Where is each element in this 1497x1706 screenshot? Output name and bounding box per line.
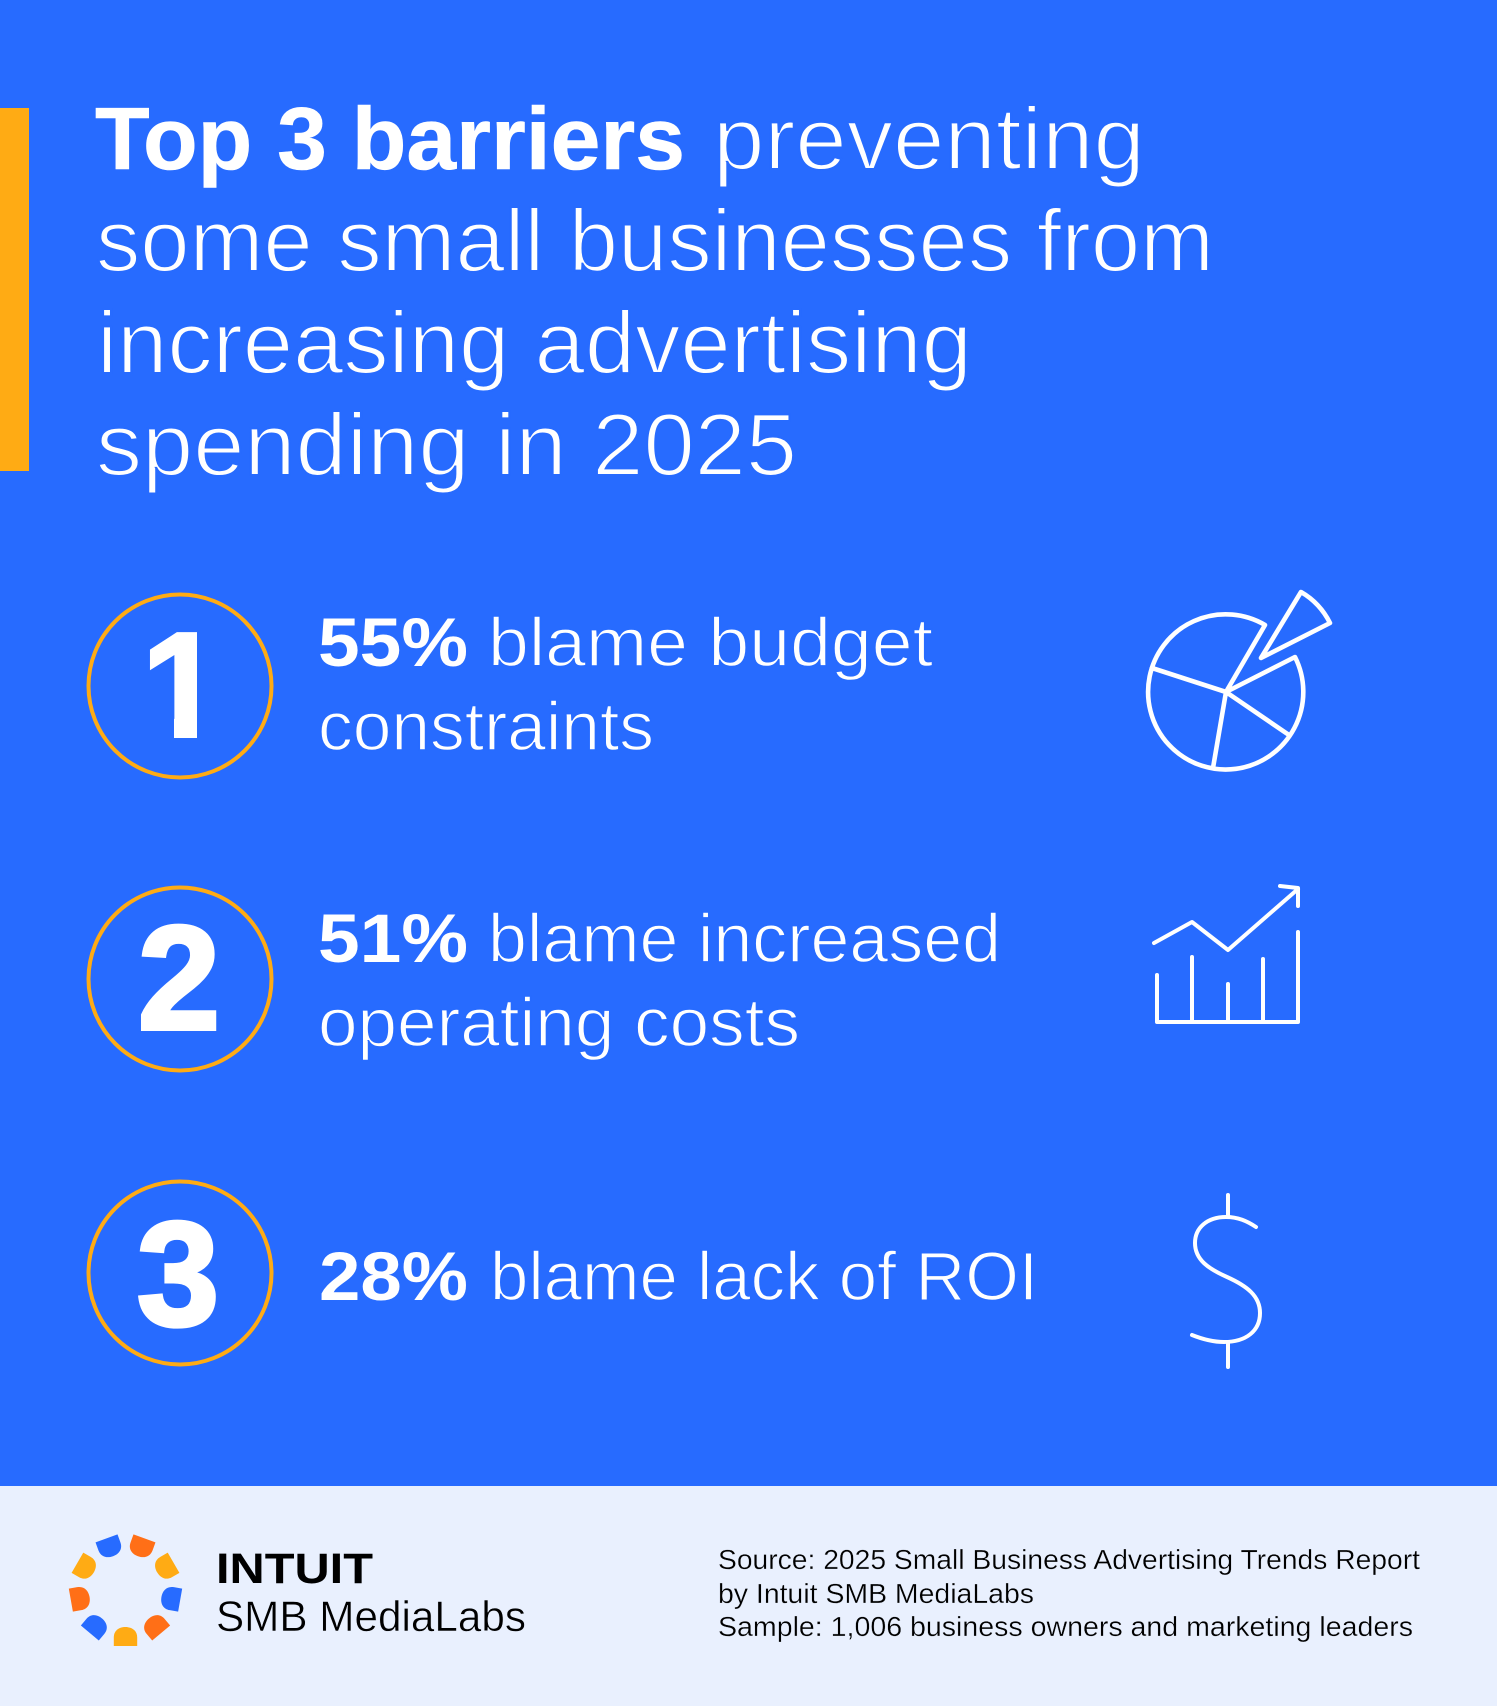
footer panel [0,1486,1497,1706]
brand name [216,1545,526,1641]
icon: growth chart [1154,886,1298,1022]
barrier 3 [88,1182,1260,1367]
brand name: SMB MediaLabs [216,1593,526,1641]
number badge 2 [88,888,272,1070]
number badge 2: 2 [138,896,220,1061]
title: Top 3 barriers [95,89,685,188]
barrier 3 text: 28% [319,1238,468,1315]
source note [718,1544,1420,1642]
logo mark [69,1534,182,1646]
barrier 3 text: blame lack of ROI [490,1238,1038,1315]
source note: Source: 2025 Small Business Advertising Trends Report [718,1544,1420,1575]
barrier 2 [88,886,1298,1070]
number badge 3 [88,1182,272,1364]
accent bar [0,108,29,471]
barrier 1 text: 55% [318,604,468,681]
source note: Sample: 1,006 business owners and marketing leaders [718,1611,1413,1642]
barrier 2 text: operating costs [318,984,800,1061]
number badge 3: 3 [137,1192,219,1357]
barrier 1 text: constraints [318,688,654,765]
title: preventing [713,89,1145,188]
barrier 2 text [318,900,1001,1061]
number badge 1 [88,594,272,778]
barrier 1 text: blame budget [488,604,933,681]
icon: dollar sign [1192,1195,1260,1367]
title [95,89,1214,494]
number badge 1: 1 [142,603,224,768]
barrier 1 [88,592,1330,778]
barrier 2 text: blame increased [488,900,1001,977]
icon: pie chart [1148,592,1330,770]
source note: by Intuit SMB MediaLabs [718,1578,1034,1609]
barrier 1 text [318,604,933,765]
title: increasing advertising [97,293,972,392]
title: spending in 2025 [96,395,797,494]
brand name: INTUIT [216,1545,373,1593]
title: some small businesses from [96,191,1214,290]
barrier 2 text: 51% [318,900,468,977]
